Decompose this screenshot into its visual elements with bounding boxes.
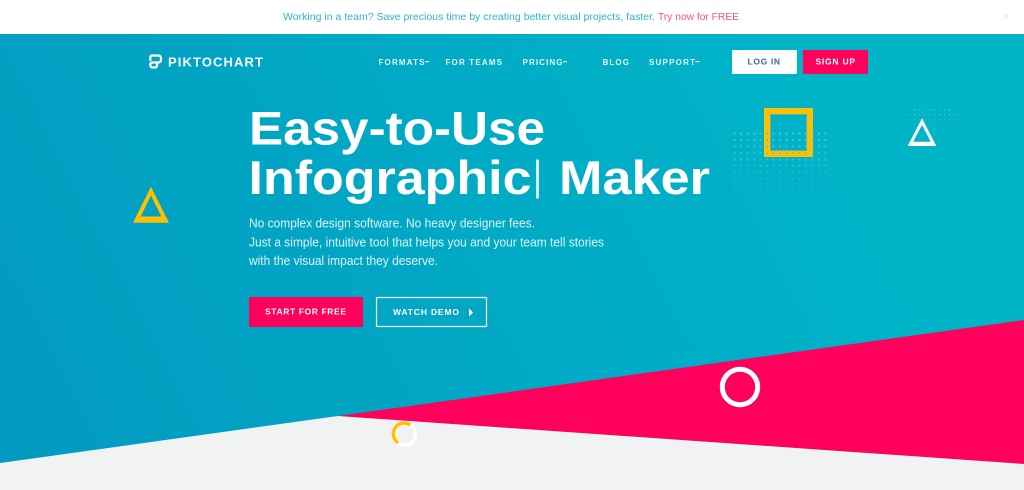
icon: play arrow (469, 308, 473, 316)
top announcement bar (0, 0, 1024, 34)
logo mark (150, 56, 161, 68)
description line 3: with the visual impact they deserve. (248, 254, 438, 268)
nav: for teams: FOR TEAMS (446, 58, 503, 67)
watch demo button: WATCH DEMO (393, 307, 459, 317)
log in button (732, 50, 797, 74)
white triangle outline (908, 118, 936, 146)
nav: formats: FORMATS (378, 58, 425, 67)
description text (248, 217, 604, 268)
dot pattern behind triangle (909, 109, 956, 135)
light grey diagonal shape (0, 416, 1024, 490)
announcement text: Working in a team? Save precious time by creating better visual projects, faster. (283, 11, 655, 23)
log in button: LOG IN (748, 56, 780, 66)
headline line 1: Easy-to-Use (249, 102, 545, 154)
logo (150, 54, 263, 70)
start for free button: START FOR FREE (265, 306, 346, 316)
white circle outline (722, 369, 758, 405)
yellow triangle outline (133, 187, 169, 223)
headline line 2: | (534, 152, 542, 199)
logo wordmark: PIKTOCHART (168, 54, 263, 70)
navigation (378, 58, 700, 67)
pink diagonal shape (338, 320, 1024, 464)
start for free button (249, 297, 363, 327)
loader ring (393, 423, 416, 445)
sign up button (803, 50, 868, 74)
headline line 2 (248, 151, 710, 204)
description line 2: Just a simple, intuitive tool that helps you and your team tell stories (249, 235, 604, 249)
nav: blog: BLOG (602, 58, 629, 67)
headline line 2: Infographic (248, 151, 532, 204)
nav: support: SUPPORT (649, 58, 695, 67)
close icon: × (1003, 12, 1009, 23)
announcement link: Try now for FREE (658, 11, 739, 23)
loader yellow arc (393, 423, 410, 443)
yellow square outline (767, 111, 810, 154)
dot pattern behind square (733, 132, 829, 192)
watch demo button (376, 298, 486, 326)
description line 1: No complex design software. No heavy designer fees. (249, 217, 535, 231)
sign up button: SIGN UP (816, 56, 855, 66)
headline line 2: Maker (559, 151, 710, 204)
nav: pricing: PRICING (522, 58, 562, 67)
headline (248, 102, 710, 204)
